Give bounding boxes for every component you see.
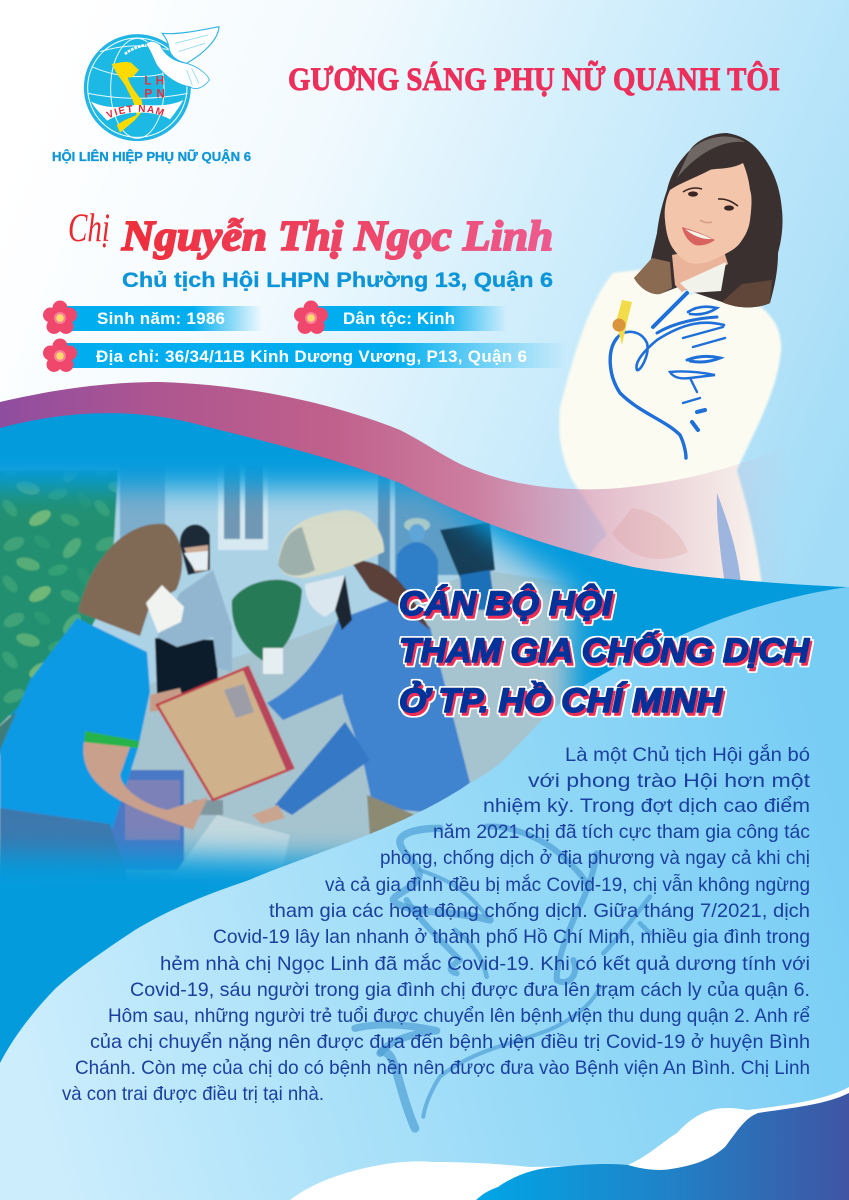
info bar: ethnicity: Dân tộc: Kinh — [343, 309, 455, 328]
dress dove — [610, 293, 725, 458]
main woman hair, shirt — [78, 524, 182, 636]
pink wave — [0, 382, 790, 590]
title: GƯƠNG SÁNG PHỤ NỮ QUANH TÔI — [288, 60, 780, 98]
woman with denim jacket — [155, 638, 218, 694]
bottom white wave — [290, 1087, 849, 1200]
hair — [634, 133, 783, 307]
article body text: phòng, chống dịch ở địa phương và ngay cả khi chị — [380, 847, 810, 869]
article body text: Là một Chủ tịch Hội gắn bó — [565, 743, 810, 766]
article body text: và cả gia đình đều bị mắc Covid-19, chị vẫn không ngừng — [325, 873, 810, 896]
info bar: birth year: Sinh năm: 1986 — [97, 309, 225, 328]
article body text: Hôm sau, những người trẻ tuổi được chuyển lên bệnh viện thu dung quận 2. Anh rể — [108, 1005, 810, 1027]
icon: flower — [294, 300, 328, 334]
article body text: với phong trào Hội hơn một — [528, 770, 811, 792]
article heading — [399, 584, 810, 720]
article body text: Covid-19, sáu người trong gia đình chị được đưa lên trạm cách ly của quận 6. — [130, 979, 810, 1001]
organization name: HỘI LIÊN HIỆP PHỤ NỮ QUẬN 6 — [52, 149, 251, 164]
background people — [395, 542, 438, 600]
info bar: birth year — [65, 306, 262, 331]
icon: flower — [43, 300, 77, 334]
article body text: Chánh. Còn mẹ của chị do có bệnh nền nên được đưa vào Bệnh viện An Bình. Chị Linh — [75, 1057, 810, 1079]
neck — [672, 245, 728, 292]
letters LHPN — [144, 75, 169, 100]
photo: volunteers handing over a box — [0, 466, 591, 879]
logo: Hoi LHPN Viet Nam: VIET NAM — [106, 104, 164, 118]
position subtitle: Chủ tịch Hội LHPN Phường 13, Quận 6 — [122, 269, 553, 292]
info bar: ethnicity — [315, 306, 507, 331]
Vietnam map — [112, 62, 143, 133]
info bar: address: Địa chỉ: 36/34/11B Kinh Dương Vương, P13, Quận 6 — [96, 347, 527, 366]
face — [665, 163, 752, 264]
wall and ground — [0, 467, 585, 685]
letters LHPN: PN — [144, 87, 169, 100]
bush — [0, 470, 118, 735]
helmet, mask, hair — [350, 560, 430, 630]
light text panel — [0, 587, 849, 1200]
letters LHPN: LH — [144, 75, 169, 88]
portrait photo: woman in ao dai — [559, 133, 783, 585]
article body text: của chị chuyển nặng nên được đưa đến bệnh viện điều trị Covid-19 ở huyện Bình — [90, 1031, 810, 1053]
article body text: Covid-19 lây lan nhanh ở thành phố Hồ Chí Minh, nhiều gia đình trong — [213, 926, 810, 948]
article body text: năm 2021 chị đã tích cực tham gia công tác — [433, 821, 810, 843]
name heading: Chị — [68, 205, 110, 250]
grate — [0, 710, 18, 755]
info bar: address — [65, 343, 567, 368]
dress embroidery — [616, 300, 632, 345]
article body text — [62, 743, 811, 1105]
article body text: hẻm nhà chị Ngọc Linh đã mắc Covid-19. Khi có kết quả dương tính với — [160, 952, 810, 975]
article body text: tham gia các hoạt động chống dịch. Giữa tháng 7/2021, dịch — [269, 900, 810, 922]
plant — [232, 580, 302, 662]
logo: Hoi LHPN Viet Nam — [84, 26, 220, 142]
ribbon — [91, 100, 183, 121]
icon: flower — [43, 338, 77, 372]
olive branch — [125, 45, 147, 54]
dress — [559, 268, 781, 585]
collar — [680, 262, 726, 293]
article body text: nhiệm kỳ. Trong đợt dịch cao điểm — [483, 795, 810, 817]
article heading: THAM GIA CHỐNG DỊCH — [399, 631, 810, 670]
article heading: Ở TP. HỒ CHÍ MINH — [399, 682, 723, 720]
name heading — [68, 205, 553, 260]
blue wave with group photo — [0, 413, 847, 1063]
watermark dove — [355, 827, 650, 1128]
bottom dark blue wave — [476, 1093, 849, 1200]
name heading: Nguyễn Thị Ngọc Linh — [121, 214, 553, 260]
article heading: CÁN BỘ HỘI — [399, 584, 614, 623]
dove — [146, 41, 209, 89]
goods — [112, 770, 184, 870]
article body text: và con trai được điều trị tại nhà. — [62, 1083, 324, 1105]
hoodie woman — [337, 600, 470, 813]
cardboard box — [157, 667, 293, 800]
